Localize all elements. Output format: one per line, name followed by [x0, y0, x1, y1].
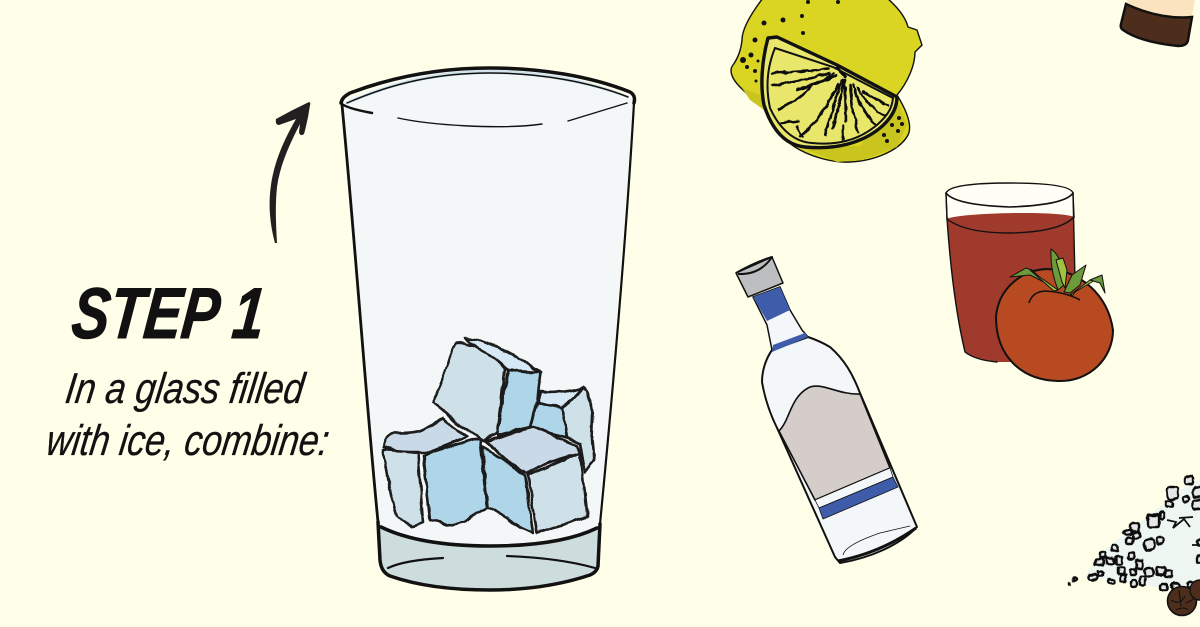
salt pile [1085, 480, 1200, 590]
instruction text [44, 365, 332, 465]
arrow pointing to glass [270, 102, 310, 243]
heading: step 1: STEP 1 [68, 274, 269, 354]
glass base [379, 525, 599, 590]
lemon shaded side [742, 88, 907, 162]
bottle bottom [838, 528, 916, 561]
left ice cube [383, 418, 487, 527]
instruction text: In a glass filled [63, 365, 309, 413]
tomato juice glass [946, 183, 1113, 381]
bottle label [779, 386, 890, 500]
bottle bottom highlight [843, 526, 910, 555]
crack marks [1167, 517, 1200, 545]
whole lemon body [731, 0, 922, 162]
glass rim highlight [346, 70, 629, 104]
juice glass empty top [946, 183, 1074, 219]
bottle neck [753, 287, 808, 350]
bottle blue stripe [819, 477, 898, 519]
salt and pepper pile [1069, 476, 1200, 616]
brown base [1121, 4, 1192, 46]
wedge inner rind [768, 48, 893, 144]
peppercorn creases [1171, 590, 1194, 610]
glass body [341, 69, 634, 546]
right ice cube [482, 427, 587, 533]
tomato leaves [1010, 249, 1105, 295]
peppercorn [1168, 586, 1196, 616]
cap opening [736, 257, 772, 274]
neck blue band [753, 287, 808, 352]
salt grains [1069, 476, 1200, 590]
top ice cube [433, 338, 540, 440]
tomato [996, 269, 1113, 381]
lemon peel pores [740, 0, 904, 143]
back ice cube [530, 387, 594, 472]
instruction text: with ice, combine: [44, 417, 332, 465]
white stripe [815, 468, 893, 508]
ice cubes [383, 338, 594, 533]
cream part [1126, 0, 1195, 18]
lemon wedge [762, 37, 897, 148]
bottle body [762, 337, 917, 563]
top right bottle [1121, 0, 1195, 46]
juice glass lines [946, 193, 1075, 362]
tomato crease [1029, 291, 1080, 303]
main glass [341, 68, 635, 590]
bottle cap [736, 257, 783, 297]
wedge segments [772, 68, 888, 140]
juice [947, 213, 1075, 362]
lemon [731, 0, 922, 162]
glass outline [341, 68, 635, 590]
second peppercorn [1190, 580, 1200, 600]
vodka bottle [736, 257, 917, 563]
